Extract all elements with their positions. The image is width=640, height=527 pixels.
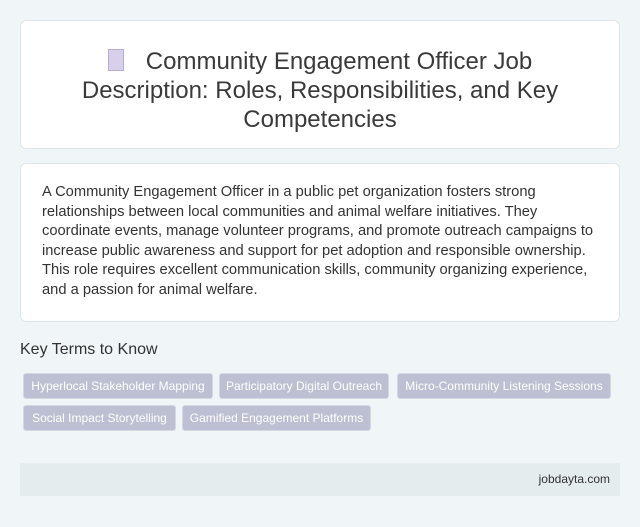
description text: increase public awareness and support for pet adoption and responsible ownership. xyxy=(42,243,586,259)
tag: Social Impact Storytelling xyxy=(32,411,167,425)
tag: Hyperlocal Stakeholder Mapping xyxy=(31,379,205,393)
title: Community Engagement Officer Job Description: Roles, Responsibilities, and Key Competencies xyxy=(82,48,558,133)
tag: Micro-Community Listening Sessions xyxy=(405,379,603,393)
description text: relationships between local communities and animal welfare initiatives. They xyxy=(42,204,537,220)
heading: key terms: Key Terms to Know xyxy=(20,341,158,358)
tag xyxy=(23,373,213,399)
tag: Gamified Engagement Platforms xyxy=(190,411,363,425)
footer xyxy=(20,463,620,496)
description card xyxy=(20,163,620,322)
tag xyxy=(182,405,371,431)
description text: A Community Engagement Officer in a public pet organization fosters strong xyxy=(42,184,536,200)
title card xyxy=(20,20,620,149)
description text: This role requires excellent communication skills, community organizing experience, xyxy=(42,262,587,278)
footer text: jobdayta.com xyxy=(539,472,610,486)
tag xyxy=(219,373,389,399)
tag xyxy=(23,405,176,431)
description text: coordinate events, manage volunteer programs, and promote outreach campaigns to xyxy=(42,223,593,239)
icon: document xyxy=(108,49,124,71)
tag: Participatory Digital Outreach xyxy=(226,379,382,393)
description text xyxy=(42,184,593,298)
description text: and a passion for animal welfare. xyxy=(42,282,258,298)
tag xyxy=(397,373,611,399)
